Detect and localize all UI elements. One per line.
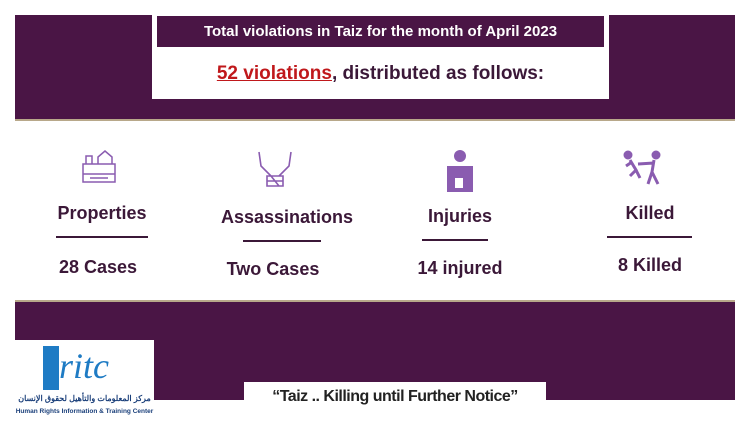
icon: attack figures <box>624 150 660 185</box>
logo <box>15 340 154 422</box>
top banner <box>15 15 735 121</box>
stat: injuries: Injuries <box>428 206 492 226</box>
stat: injuries <box>417 150 503 278</box>
icon: hands <box>258 152 292 187</box>
logo: ritc <box>59 346 109 386</box>
title box <box>152 15 609 99</box>
icon: injured person <box>447 150 473 192</box>
stat: killed: Killed <box>625 203 674 223</box>
title strip: Total violations in Taiz for the month of April 2023 <box>204 23 557 40</box>
stat: properties: 28 Cases <box>59 257 137 277</box>
stat: assassinations: Assassinations <box>221 207 353 227</box>
stat: injuries: 14 injured <box>417 258 503 278</box>
quote: “Taiz .. Killing until Further Notice” <box>272 388 518 405</box>
stat: killed: 8 Killed <box>618 255 682 275</box>
stat: assassinations: Two Cases <box>227 259 319 279</box>
title strip <box>157 16 604 47</box>
quote <box>244 382 546 410</box>
logo: Human Rights Information & Training Center <box>16 408 153 415</box>
stat: properties: Properties <box>57 203 147 223</box>
stat: killed <box>607 150 692 275</box>
stat: properties <box>56 150 148 277</box>
icon: house <box>82 150 116 183</box>
logo: مركز المعلومات والتأهيل لحقوق الإنسان <box>18 394 151 403</box>
bottom banner <box>15 300 735 400</box>
stat: assassinations <box>221 152 353 279</box>
subtitle: 52 violations, distributed as follows: <box>217 63 544 84</box>
